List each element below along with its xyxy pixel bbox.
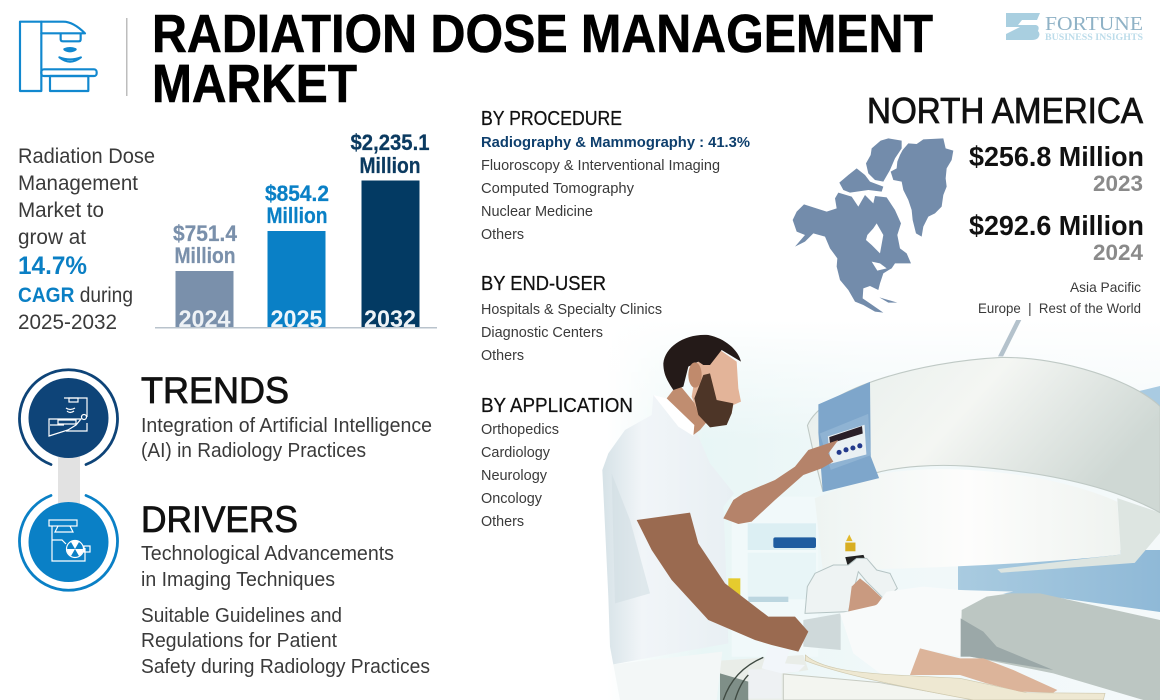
trouser shade [961,618,1053,670]
segment: by application [481,395,633,530]
bar 2025: Million [266,203,328,228]
drivers heading: DRIVERS [141,499,298,540]
bar 2024 [173,221,238,333]
control panel [818,382,879,492]
title: MARKET [152,54,357,114]
bar 2024: 2024 [178,306,231,333]
segment: by procedure: Computed Tomography [481,180,634,197]
region block: 2024 [1093,240,1144,265]
bar chart [155,130,437,333]
bar 2032 [350,130,430,333]
drivers block [141,499,430,678]
room background [590,320,1160,700]
region block: Europe | Rest of the World [978,300,1141,316]
great lakes [872,262,887,271]
segment: by application: BY APPLICATION [481,395,633,417]
segment: by end-user: BY END-USER [481,273,606,295]
map: north america [793,138,953,313]
patient trousers [961,593,1160,700]
bar 2032: Million [360,153,420,178]
bed side [720,673,748,700]
doctor neck [667,383,708,435]
segment: by application: Cardiology [481,444,550,461]
trends text [141,415,432,462]
segment: by end-user: Others [481,347,524,364]
bar 2025: $854.2 [265,181,329,206]
segment: by procedure [481,108,750,243]
trends text: Integration of Artificial Intelligence [141,415,432,437]
segment: by application: Orthopedics [481,421,559,438]
doctor face [692,350,741,427]
ellesmere [866,138,902,182]
scanner lower disc [815,469,1121,570]
coat shade [612,473,650,603]
segment: by procedure: BY PROCEDURE [481,108,622,130]
market growth text: Management [18,172,138,195]
connector between badges [58,457,80,504]
segment: by application: Others [481,513,524,530]
shelves [728,497,818,657]
title: RADIATION DOSE MANAGEMENT [152,4,933,64]
handheld device [762,647,805,673]
market growth text: 2025-2032 [18,311,117,334]
drivers text [141,543,430,678]
drivers text: Suitable Guidelines and [141,605,342,627]
segment: by application: Oncology [481,490,542,507]
market growth text [18,145,155,334]
segment: by procedure: Nuclear Medicine [481,203,593,220]
cushion [805,655,1105,700]
hudson bay [866,223,883,253]
drivers text: Safety during Radiology Practices [141,656,430,678]
patient arm [910,648,1057,693]
scanner wedge [997,498,1160,573]
bar 2025: 2025 [270,306,322,333]
arctic islands [839,168,883,193]
logo mark [1006,13,1040,40]
head coil [805,558,897,613]
region name: NORTH AMERICA [867,90,1143,131]
doctor trousers [613,652,722,700]
holder [748,669,782,699]
market growth text: CAGR during [18,284,133,307]
trends block [141,370,432,462]
patient face [848,578,884,612]
badge: drivers [20,496,118,590]
cables [723,657,763,700]
title [152,4,933,114]
logo tagline: BUSINESS INSIGHTS [1045,33,1143,43]
bed rail [783,674,977,700]
brand icon: scanner [20,22,97,91]
market growth text: Radiation Dose [18,145,155,168]
patient shirt [840,587,1013,675]
segment: by procedure: Radiography & Mammography : 41.3% [481,134,750,151]
drivers text: in Imaging Techniques [141,569,335,591]
segment: by end-user: Diagnostic Centers [481,324,603,341]
patient on bed [720,558,1160,700]
other regions: Asia Pacific [1070,279,1141,295]
market growth text: grow at [18,226,86,249]
doctor [602,335,838,700]
segment: by application: Neurology [481,467,547,484]
bar 2032: 2032 [364,306,416,333]
warning labels [845,535,866,565]
blue wall top [1135,386,1160,408]
bar 2024: $751.4 [173,221,238,246]
trends text: (AI) in Radiology Practices [141,440,366,462]
bar 2025 [265,181,329,333]
divider [126,18,128,96]
background fade [590,320,1160,700]
cuba [879,297,897,303]
ceiling arm [998,320,1021,356]
icon: scanner trends [49,398,87,436]
segment: by end-user [481,273,662,364]
market growth text: 14.7% [18,252,87,280]
lower arm [637,513,808,652]
trends heading: TRENDS [141,370,289,411]
doctor hair [663,335,741,390]
bar 2024: Million [174,243,236,268]
scanner [807,320,1160,573]
value 2023: $256.8 Million [969,141,1144,172]
blue wall [958,550,1160,612]
doctor collar [653,395,694,436]
doctor beard [694,373,733,427]
photo: technician operating scanner with patient [590,320,1160,700]
segment: by procedure: Fluoroscopy & Interventional Imaging [481,157,720,174]
badge: trends [20,370,118,464]
value 2024: $292.6 Million [969,210,1144,241]
market growth text: Market to [18,199,104,222]
doctor ear [688,362,702,388]
top fade [590,320,1160,700]
bed base [720,655,808,700]
region block [867,90,1144,316]
mainland [793,193,911,313]
logo name: FORTUNE [1045,13,1143,35]
segment: by procedure: Others [481,226,524,243]
doctor coat [602,395,734,664]
greenland [891,138,953,237]
raised arm [723,440,838,524]
bar 2032: $2,235.1 [350,130,430,155]
brand logo [1006,13,1143,43]
coil block [803,613,841,650]
region block: 2023 [1093,171,1143,196]
icon: radiation machine [49,520,90,561]
drivers text: Technological Advancements [141,543,394,565]
scanner upper disc [807,357,1160,513]
drivers text: Regulations for Patient [141,630,337,652]
segment: by end-user: Hospitals & Specialty Clinics [481,301,662,318]
